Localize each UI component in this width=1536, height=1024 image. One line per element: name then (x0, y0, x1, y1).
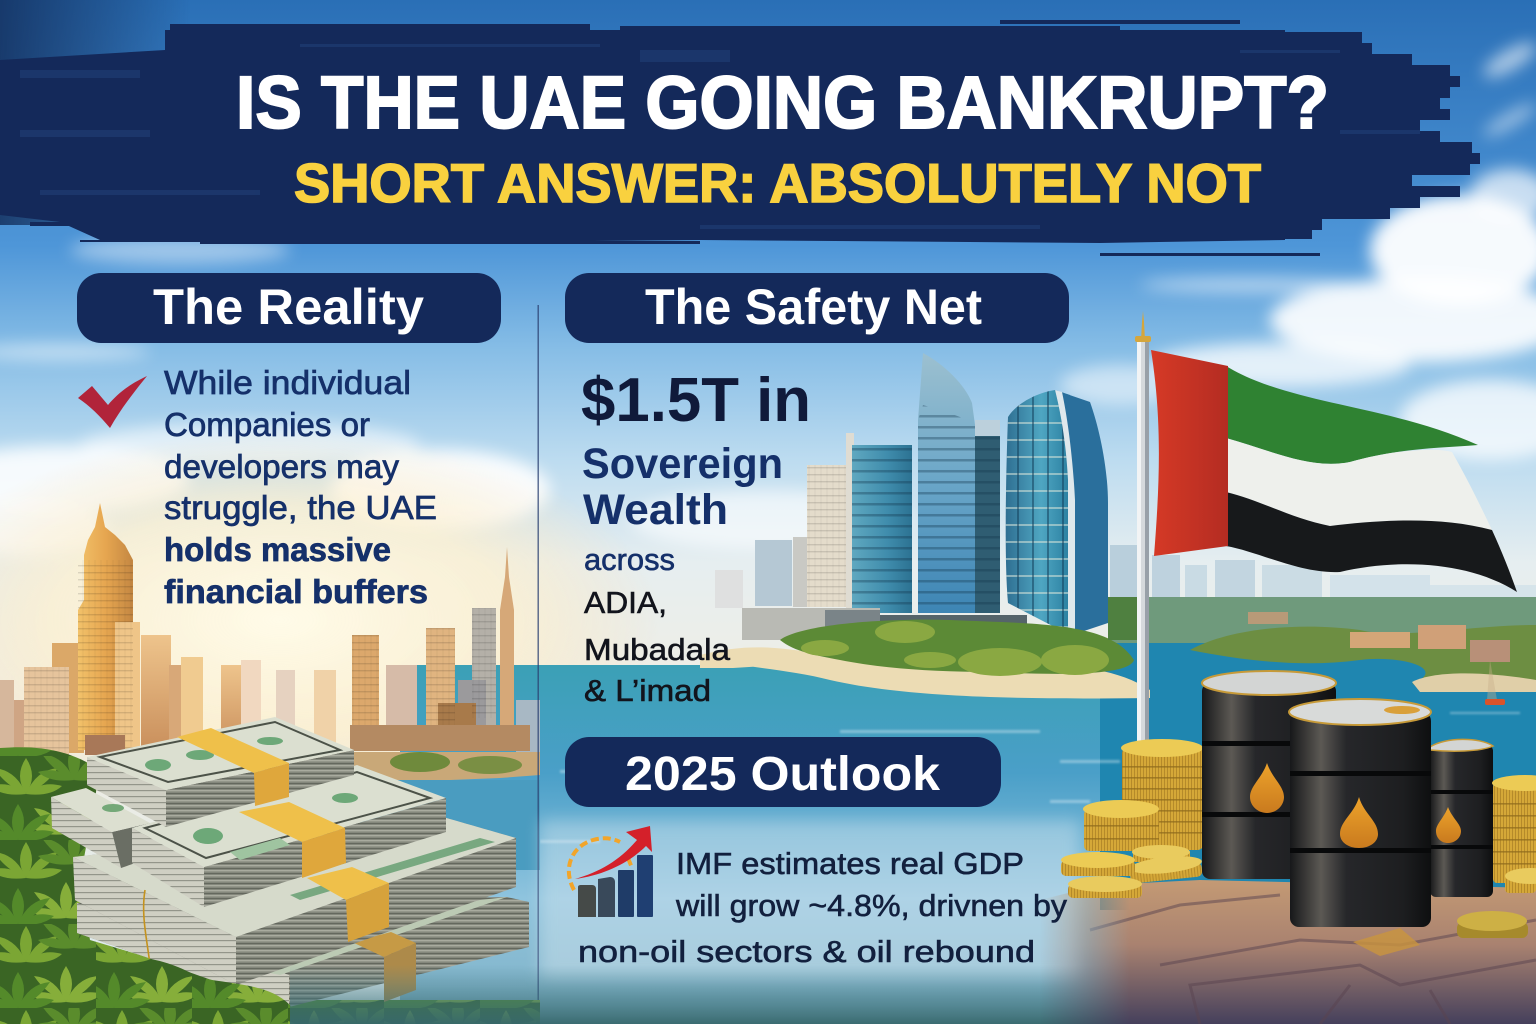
wash behind outlook text (540, 820, 1080, 980)
sea (400, 640, 1536, 1024)
clouds (0, 36, 1536, 556)
text block: reality: Companies or (164, 406, 370, 443)
stack: bottom (77, 897, 529, 1007)
divider (538, 305, 539, 1003)
text block: reality (164, 364, 437, 610)
text block: sovereign wealth (582, 440, 783, 534)
text block: funds: ADIA, (584, 585, 667, 620)
money stacks (51, 717, 529, 1007)
heading: the safety net (565, 273, 1069, 343)
foliage: foreground (70, 956, 300, 1024)
foliage (0, 747, 540, 1024)
oil barrel: back left (1202, 671, 1336, 879)
text block: funds (584, 542, 731, 708)
panel: 2025 outlook (565, 737, 1068, 969)
coins: left stacks (1061, 739, 1203, 898)
stack: third (73, 817, 516, 985)
text block: imf outlook: IMF estimates real GDP (676, 846, 1024, 881)
skyline: golden city left (0, 503, 540, 757)
stat: 1.5T: $1.5T in (581, 366, 811, 435)
far shore: right islands (1108, 597, 1536, 705)
text block: reality: While individual (164, 364, 411, 401)
stack: left small (51, 788, 150, 868)
icon: check mark (78, 376, 147, 428)
text block: funds: across (584, 542, 675, 577)
background: sun glow (0, 430, 660, 810)
UAE flag (1151, 350, 1517, 592)
text block: imf outlook: will grow ~4.8%, drivnen by (675, 888, 1068, 923)
heading: the safety net: The Safety Net (645, 279, 982, 335)
central towers (742, 353, 1108, 640)
text block: reality: developers may (164, 448, 400, 485)
text block: funds: & L’imad (584, 673, 711, 708)
flag pole (1135, 311, 1151, 742)
stack: top (87, 717, 354, 827)
text block: reality: financial buffers (164, 573, 428, 610)
heading: 2025 outlook (565, 737, 1001, 807)
text block: sovereign wealth: Wealth (583, 486, 728, 534)
skyline: distant towers right (715, 537, 1536, 608)
text block: imf outlook: non-oil sectors & oil rebound (578, 934, 1035, 969)
rock ledge (1040, 880, 1536, 1024)
heading: the reality: The Reality (153, 279, 424, 335)
text block: funds: Mubadala (584, 632, 731, 667)
oil barrel: right (1430, 739, 1493, 897)
stack: second (132, 765, 446, 907)
far shore: left bay (340, 752, 540, 870)
icon: growth chart (569, 826, 653, 917)
text block: sovereign wealth: Sovereign (582, 440, 783, 488)
coins: right stacks (1457, 775, 1536, 938)
title: IS THE UAE GOING BANKRUPT? (236, 61, 1329, 144)
heading: 2025 outlook: 2025 Outlook (625, 748, 940, 801)
text block: reality: struggle, the UAE (164, 489, 437, 526)
subtitle: SHORT ANSWER: ABSOLUTELY NOT (294, 152, 1261, 214)
panel: the safety net (565, 273, 1069, 708)
central island (700, 597, 1150, 698)
oil barrel: front (1289, 699, 1431, 927)
heading: the reality (77, 273, 501, 343)
bottom fade (290, 965, 1140, 1024)
banner (0, 0, 1480, 256)
text block: imf outlook (578, 846, 1068, 969)
text block: reality: holds massive (164, 531, 391, 568)
panel: the reality (77, 273, 501, 610)
